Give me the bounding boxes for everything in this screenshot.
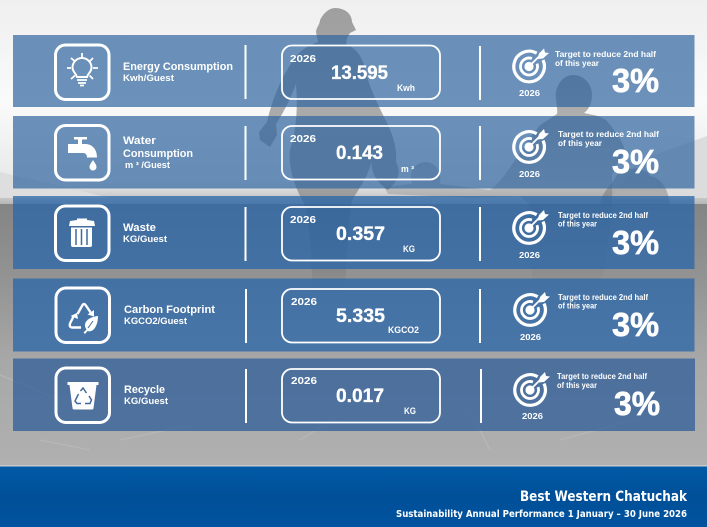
carbon target: Target to reduce 2nd half [558,293,648,302]
water target [514,129,659,180]
energy value box: Kwh [397,83,415,93]
icon: recycle bin [56,368,110,422]
recycle label [124,384,168,406]
water label: m ³ /Guest [125,160,170,170]
water label [123,135,193,170]
carbon value box: KGCO2 [388,325,419,335]
waste target: 3% [612,224,659,261]
panel: recycle [13,358,695,431]
footer band [0,465,707,527]
recycle target: Target to reduce 2nd half [557,372,647,381]
recycle value box: KG [404,406,416,416]
recycle value box [282,369,440,422]
waste label [123,222,167,244]
icon: recycle leaf [56,288,110,342]
carbon label [124,304,215,326]
energy label: Energy Consumption [123,61,233,73]
water value box: 2026 [290,134,317,145]
waste label: Waste [123,222,156,234]
energy target: 2026 [519,88,540,98]
energy target: of this year [555,58,600,68]
recycle label: KG/Guest [124,396,168,406]
energy target: 3% [612,62,659,99]
water value box: m ³ [401,164,414,174]
water value box: 0.143 [336,142,383,164]
energy value box [282,46,440,99]
panel: energy consumption [13,35,694,107]
energy label [123,61,233,83]
panel: carbon footprint [13,278,694,352]
icon: trash bin [56,206,109,260]
carbon target: 3% [612,306,659,343]
recycle label: Recycle [124,384,165,396]
waste target: 2026 [519,250,540,260]
waste target: Target to reduce 2nd half [558,211,648,220]
waste target [514,210,659,261]
carbon target: 2026 [520,332,541,342]
waste value box [282,207,440,260]
waste value box: 0.357 [336,223,385,245]
recycle target [515,372,660,422]
child silhouette [384,75,625,300]
woman silhouette [259,8,399,300]
distant tree [600,168,670,205]
recycle target: of this year [557,381,597,390]
recycle value box: 2026 [291,376,318,387]
icon: light bulb [56,45,109,100]
recycle value box: 0.017 [336,385,384,407]
panel: water consumption [13,116,694,188]
carbon value box: 2026 [291,297,318,308]
carbon value box [282,289,440,342]
water target: 3% [612,143,659,180]
waste value box: KG [403,244,415,254]
water target: 2026 [519,169,540,179]
energy target: Target to reduce 2nd half [555,49,656,59]
energy value box: 13.595 [331,62,388,84]
water target: Target to reduce 2nd half [558,129,659,139]
water value box [282,126,440,180]
recycle target: 2026 [522,411,543,421]
energy target [514,48,659,99]
carbon target: of this year [558,302,597,310]
carbon label: Carbon Footprint [124,304,215,316]
icon: water tap [56,126,109,180]
carbon target [515,292,659,343]
water label: Water [123,135,157,147]
energy label: Kwh/Guest [123,73,174,83]
water label: Consumption [123,148,193,160]
carbon value box: 5.335 [336,305,385,327]
carbon label: KGCO2/Guest [124,316,187,326]
waste target: of this year [558,220,597,228]
waste value box: 2026 [290,215,317,226]
energy value box: 2026 [290,54,317,65]
panel: waste [13,196,694,269]
waste label: KG/Guest [123,234,167,244]
recycle target: 3% [614,385,660,422]
water target: of this year [558,138,603,148]
